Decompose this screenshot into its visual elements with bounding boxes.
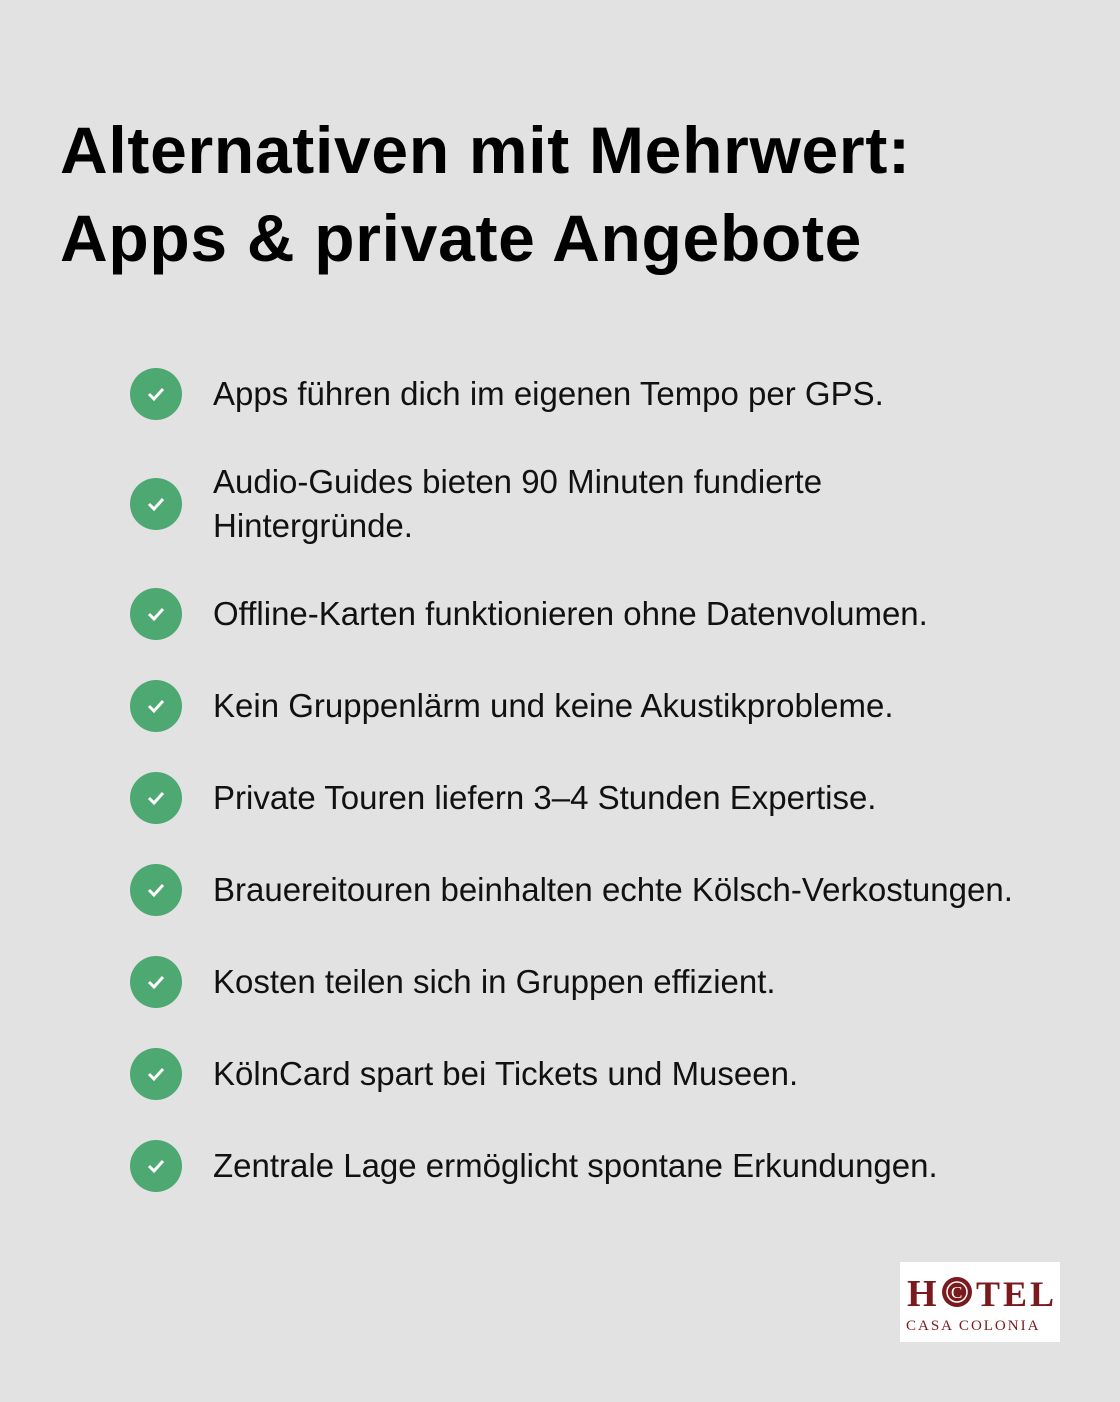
list item 5 <box>130 772 876 824</box>
title <box>60 113 911 275</box>
list item 5: Private Touren liefern 3–4 Stunden Expertise. <box>213 779 876 816</box>
list item 8 <box>130 1048 798 1100</box>
list item 9: Zentrale Lage ermöglicht spontane Erkundungen. <box>213 1147 938 1184</box>
title: Apps & private Angebote <box>60 201 862 275</box>
list item 2: Hintergründe. <box>213 507 413 544</box>
list item 2: Audio-Guides bieten 90 Minuten fundierte <box>213 463 822 500</box>
list item 6: Brauereitouren beinhalten echte Kölsch-Verkostungen. <box>213 871 1013 908</box>
title: Alternativen mit Mehrwert: <box>60 113 911 187</box>
list item 7: Kosten teilen sich in Gruppen effizient. <box>213 963 776 1000</box>
list item 1 <box>130 368 884 420</box>
list item 9 <box>130 1140 938 1192</box>
list item 8: KölnCard spart bei Tickets und Museen. <box>213 1055 798 1092</box>
list item 3 <box>130 588 928 640</box>
logo: C <box>951 1283 962 1302</box>
list item 1: Apps führen dich im eigenen Tempo per GPS. <box>213 375 884 412</box>
list item 7 <box>130 956 776 1008</box>
list item 2 <box>130 463 822 544</box>
list item 6 <box>130 864 1013 916</box>
list item 3: Offline-Karten funktionieren ohne Datenvolumen. <box>213 595 928 632</box>
logo: TEL <box>976 1274 1057 1314</box>
list item 4 <box>130 680 894 732</box>
logo: CASA COLONIA <box>906 1318 1040 1334</box>
list item 4: Kein Gruppenlärm und keine Akustikprobleme. <box>213 687 894 724</box>
logo <box>900 1262 1060 1342</box>
logo: H <box>907 1273 937 1315</box>
